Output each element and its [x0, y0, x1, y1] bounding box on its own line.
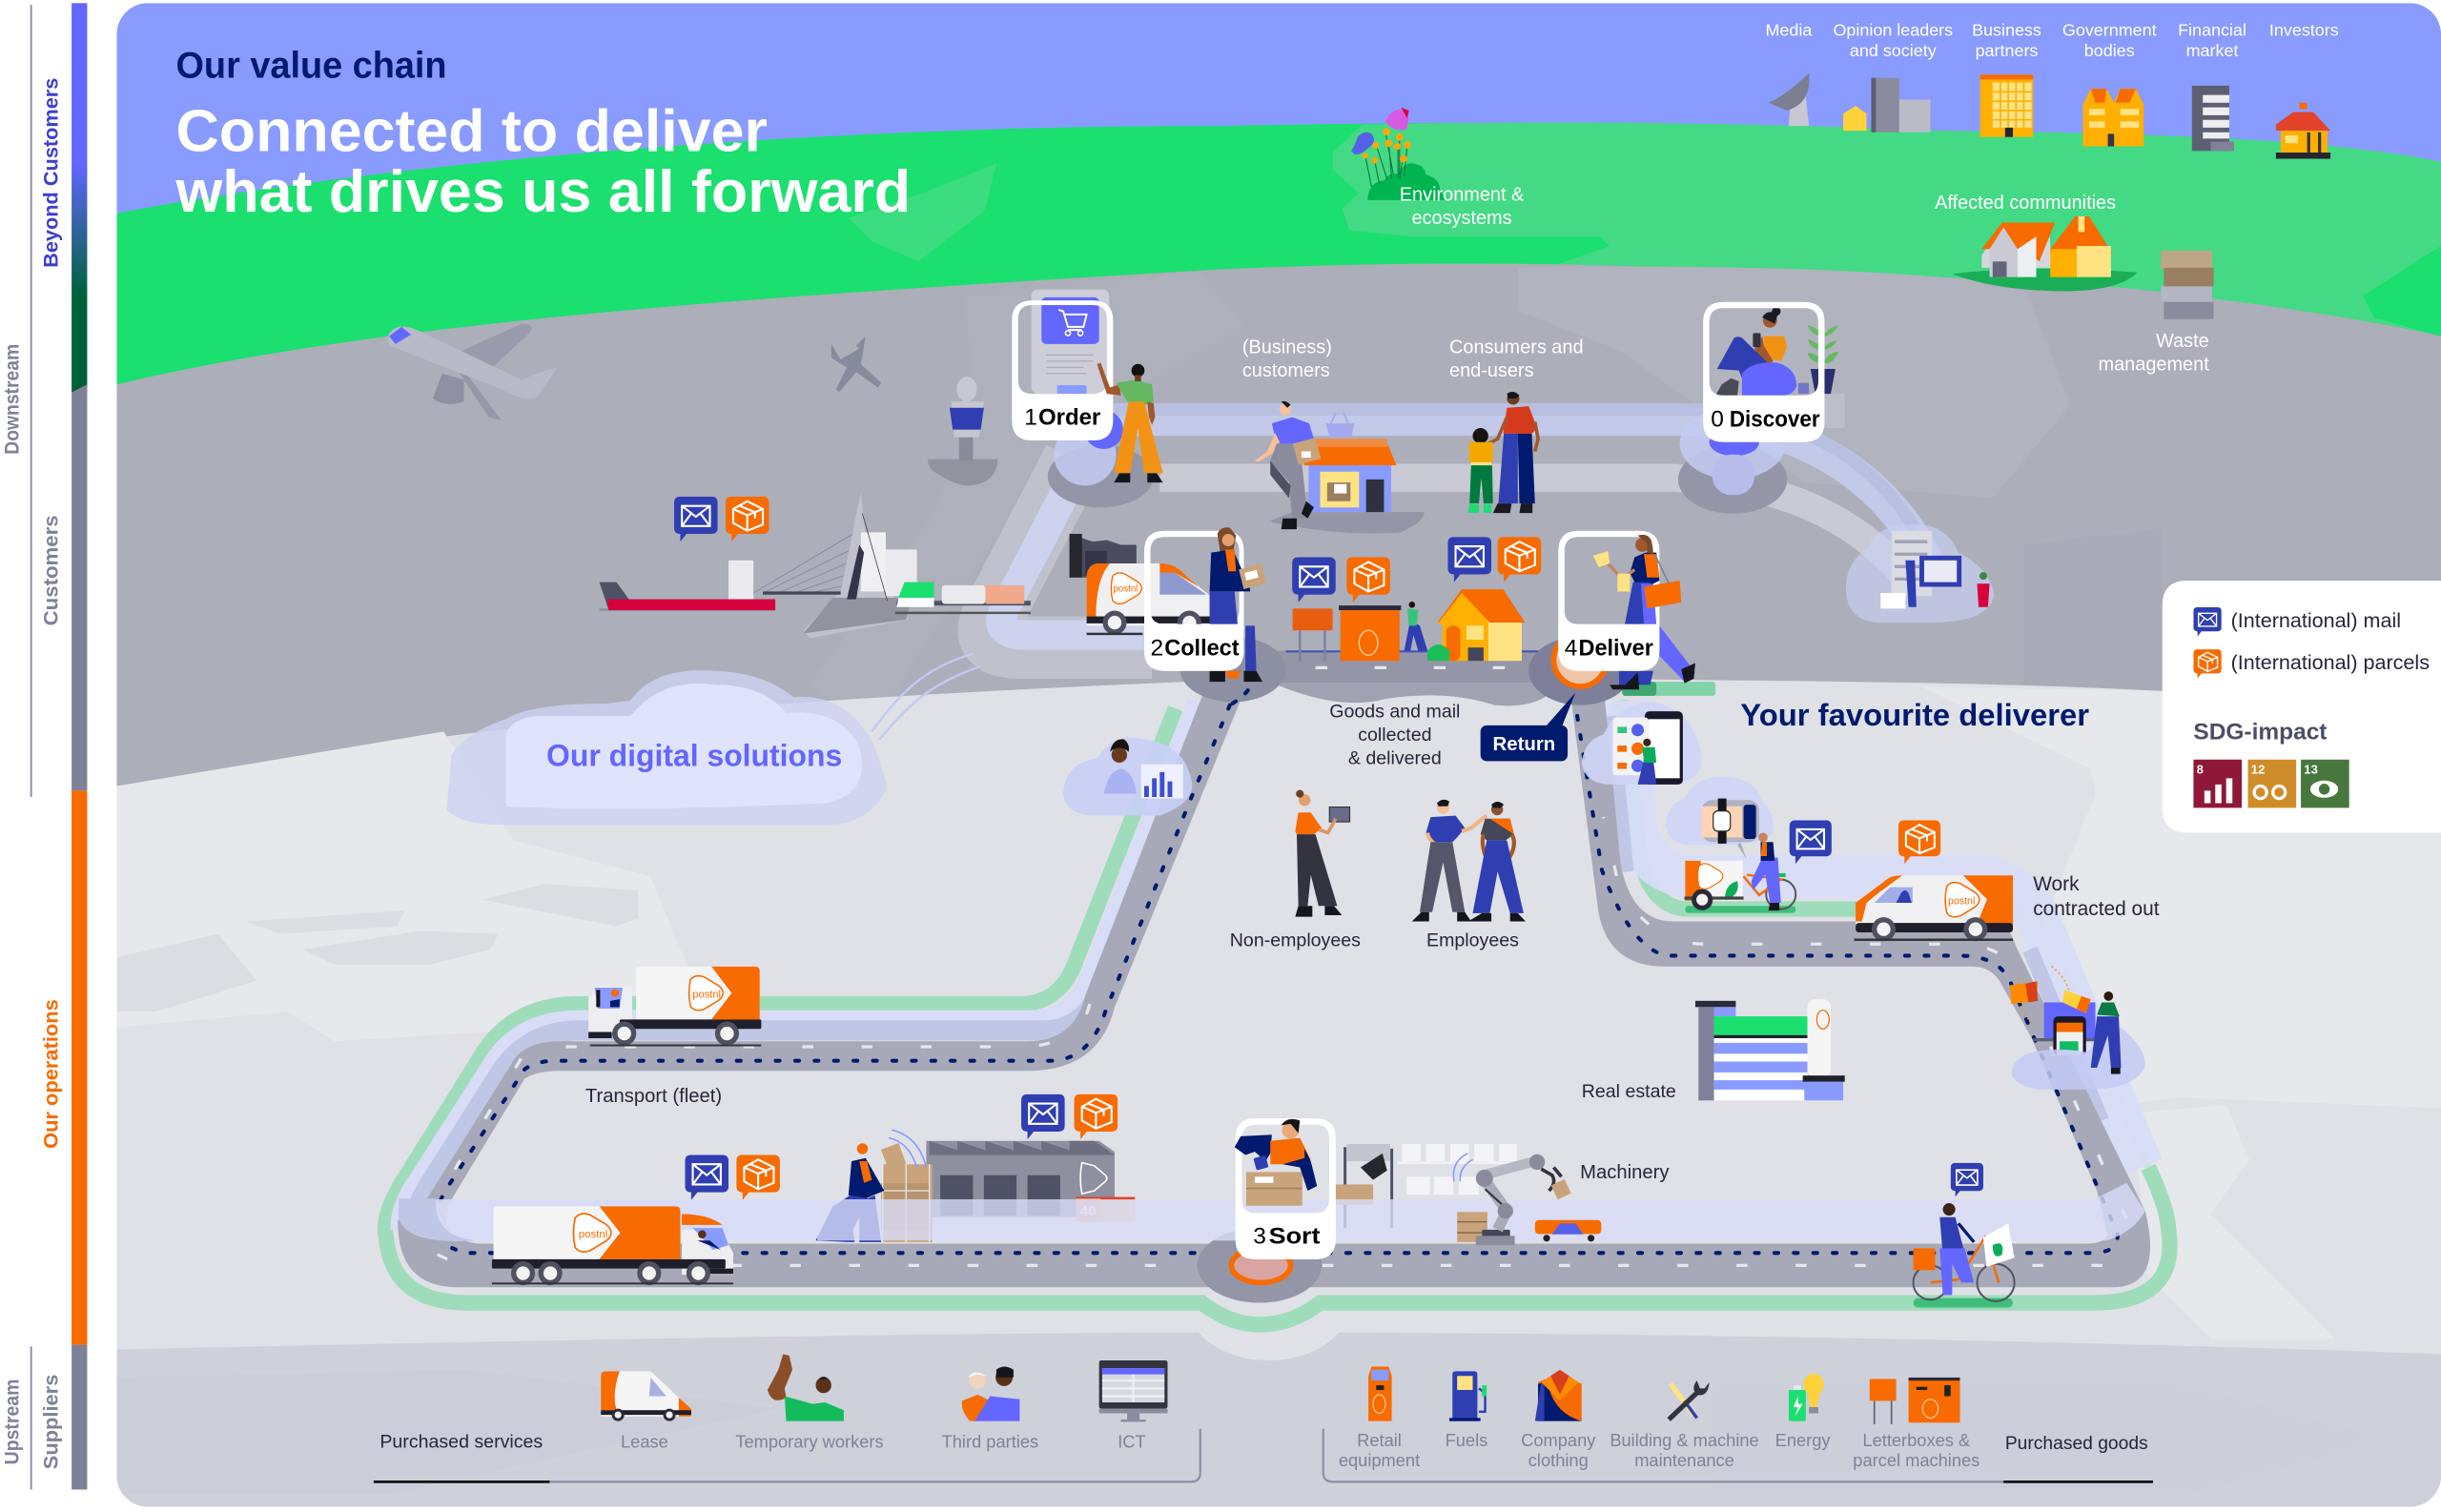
- transport label: Transport (fleet): [585, 1086, 722, 1107]
- goods labels: Building & machine: [1610, 1430, 1759, 1450]
- label: Customers: Customers: [40, 515, 62, 625]
- customers label: (Business): [1242, 337, 1332, 358]
- icon: tall yellow building: [1980, 74, 2033, 137]
- icon: plants, environment and ecosystems: [1351, 108, 1446, 200]
- green route band: [385, 701, 2170, 1324]
- icon: AGV robot: [1535, 1220, 1601, 1241]
- goods labels: Fuels: [1446, 1430, 1487, 1450]
- non-employees label: Non-employees: [1230, 930, 1361, 951]
- cloud: data centre and laptop: [1846, 524, 1994, 623]
- step label: Goods and mail: [1329, 702, 1460, 769]
- goods labels: clothing: [1528, 1450, 1589, 1470]
- upper route: Order to Discover to cloud: [1113, 409, 1930, 579]
- icon: temporary worker: [768, 1354, 844, 1421]
- legend panel: [2163, 581, 2441, 832]
- icon: energy: [1789, 1374, 1824, 1421]
- legend panel: (International) mail: [2231, 608, 2401, 632]
- top stakeholder labels: Opinion leaders: [1833, 21, 1953, 40]
- icon: train: [895, 582, 1031, 614]
- lavender stream overlay on warehouse and machines: [817, 1183, 2145, 1240]
- icon: bridge: [753, 492, 917, 638]
- step label: Goods and mail: Goods and mail: [1329, 702, 1460, 723]
- collect road dots over circle: [1230, 660, 1254, 705]
- icon: bubbles at ship: [674, 497, 769, 541]
- waste management label: Waste: [2156, 331, 2209, 352]
- customers label: customers: [1242, 360, 1330, 381]
- step label: 4 Deliver: Deliver: [1579, 635, 1653, 661]
- consumers label: [1449, 337, 1584, 381]
- person: non-employee: [1295, 790, 1350, 917]
- services labels: Lease: [621, 1431, 668, 1451]
- icon: parcel machine and letterbox at collect: [1293, 602, 1427, 661]
- person: discover reader: [1715, 307, 1809, 396]
- title: [174, 46, 911, 225]
- legend panel: 8: [2197, 762, 2204, 776]
- plant behind discover card: [1808, 320, 1845, 428]
- environment label: ecosystems: [1412, 208, 1512, 229]
- icon: fleet truck: [588, 967, 761, 1046]
- people: employees: [1412, 800, 1526, 922]
- affected communities label: Affected communities: [1935, 193, 2116, 214]
- people: parent and child: [1468, 392, 1538, 513]
- icon: mail bubble at cyclist: [1951, 1163, 1983, 1196]
- icon: satellite dish: [1769, 73, 1810, 126]
- services labels: ICT: [1118, 1431, 1146, 1451]
- step label: 4 Deliver: [1558, 624, 1659, 671]
- step card: 0 Discover: Discover: [1730, 406, 1820, 432]
- icon: big truck: postnl: [579, 1229, 607, 1240]
- work contracted out label: [2033, 873, 2160, 920]
- cloud: phone app: [1582, 702, 1702, 785]
- icon: waste stack: [2161, 251, 2214, 319]
- icon: third parties: [962, 1366, 1019, 1421]
- icon: house: [1427, 589, 1526, 661]
- step card: 1 Order: 1: [1024, 405, 1037, 431]
- icon: investors house: [2276, 103, 2330, 159]
- step label: 3 Sort: 3: [1253, 1224, 1266, 1250]
- cloud: parcel locker app: [2010, 967, 2145, 1090]
- real estate label: Real estate: [1582, 1081, 1676, 1102]
- route stops: Order and Discover circles: [1048, 408, 1787, 514]
- step label: Goods and mail: collected: [1358, 725, 1431, 746]
- services labels: [621, 1431, 1146, 1451]
- step card: 0 Discover: 0: [1711, 406, 1724, 432]
- label: Upstream: Upstream: [2, 1379, 24, 1464]
- waste management label: management: [2099, 355, 2209, 376]
- step label: 2 Collect: [1144, 624, 1243, 671]
- icon: company clothing: [1535, 1370, 1582, 1421]
- top stakeholder labels: Media: [1765, 21, 1812, 40]
- icon: bubbles at parcel machine: [1292, 558, 1390, 603]
- icon: lease van: [601, 1371, 691, 1421]
- top stakeholder labels: bodies: [2084, 41, 2135, 60]
- icon: ICT monitor: [1099, 1360, 1167, 1421]
- icon: letterbox and parcel machine: [1870, 1378, 1960, 1424]
- step label: 3 Sort: [1236, 1213, 1336, 1259]
- person pointing at phone: [1097, 362, 1163, 482]
- consumers label: Consumers and: [1449, 337, 1584, 358]
- top stakeholder labels: and society: [1850, 41, 1937, 60]
- person: deliverer: [1593, 535, 1715, 696]
- legend panel: SDG-impact: [2193, 720, 2327, 746]
- step label: Goods and mail: & delivered: [1348, 748, 1442, 769]
- top stakeholder labels: Financial: [2178, 21, 2246, 40]
- icon: houses, affected communities: [1952, 216, 2138, 291]
- goods labels: Letterboxes &: [1862, 1430, 1970, 1450]
- person: business customer: [1255, 401, 1321, 529]
- icon: distant factory: [1070, 534, 1137, 578]
- person: warehouse worker with parcels: [816, 1130, 933, 1242]
- icon: tools: [1669, 1380, 1710, 1420]
- icon: delivery van: postnl: [1948, 896, 1975, 908]
- consumers label: end-users: [1449, 360, 1534, 381]
- icon: financial tower: [2192, 86, 2234, 151]
- icon: bubbles at warehouse: [1021, 1094, 1118, 1139]
- icon: warehouse: [926, 1141, 1135, 1222]
- icon: real estate: [1695, 999, 1845, 1100]
- route stops: Collect, Deliver and Sort circles: [1180, 634, 1631, 1303]
- icon: big truck: [492, 1206, 733, 1285]
- machinery label: Machinery: [1580, 1162, 1670, 1183]
- icon: fleet truck: postnl: [692, 990, 721, 1001]
- work contracted out label: contracted out: [2033, 898, 2160, 920]
- work contracted out label: Work: [2033, 873, 2080, 895]
- cloud: smart watch: [1666, 777, 1774, 859]
- top stakeholder labels: market: [2186, 41, 2238, 60]
- icon: robot arm: [1453, 1154, 1571, 1245]
- goods labels: parcel machines: [1853, 1450, 1979, 1470]
- icon: cargo bike: [1685, 832, 1795, 913]
- services labels: Third parties: [942, 1431, 1038, 1451]
- digital solutions cloud: Our digital solutions: [546, 737, 842, 772]
- icon: cyclist: [1914, 1203, 2015, 1307]
- title: Connected to deliver: [175, 98, 768, 164]
- legend panel: (International) parcels: [2231, 650, 2430, 674]
- environment label: Environment &: [1400, 185, 1524, 206]
- icon: small plane: [831, 337, 881, 392]
- goods labels: [1339, 1430, 1979, 1470]
- person: sorter: [1235, 1119, 1317, 1206]
- goods labels: Energy: [1775, 1430, 1831, 1450]
- label: Suppliers: Suppliers: [40, 1375, 62, 1469]
- icon: delivery van: [1854, 875, 2013, 941]
- employees label: Employees: [1426, 930, 1519, 951]
- title: what drives us all forward: [174, 159, 911, 225]
- top stakeholder labels: Government: [2062, 21, 2157, 40]
- icon: fuel pump: [1449, 1371, 1487, 1421]
- step card: 1 Order: Order: [1038, 405, 1101, 431]
- road: [398, 684, 2150, 1287]
- top stakeholder labels: partners: [1976, 41, 2038, 60]
- legend panel: 13: [2304, 762, 2318, 776]
- left stakeholder bars: [31, 3, 87, 1489]
- legend panel: 12: [2251, 762, 2265, 776]
- icon: bubbles at truck: [685, 1154, 780, 1200]
- heading: Your favourite deliverer: Your favourite deliverer: [1740, 697, 2089, 732]
- phone on order screen: [1032, 290, 1109, 395]
- person: courier at collect: [1210, 527, 1266, 682]
- step label: 2 Collect: Collect: [1164, 635, 1240, 661]
- cloud: support agent: [1063, 738, 1192, 816]
- icon: sorting machines and shelves: [1336, 1144, 1523, 1228]
- customers label: [1242, 337, 1332, 381]
- icon: control tower: [928, 377, 998, 485]
- upper route: Order to Collect: [989, 455, 1152, 647]
- icon: bubbles at house: [1447, 537, 1541, 582]
- step card frame: 2 Collect: [1144, 531, 1243, 671]
- icon: office blocks: [1843, 78, 1930, 133]
- label: Downstream: Downstream: [2, 344, 24, 455]
- lavender stream: [399, 701, 2143, 1230]
- return tag: Return: [1493, 734, 1555, 755]
- road markings: [437, 705, 2126, 1265]
- icon: government building: [2082, 89, 2144, 146]
- icon: collect van: [1087, 563, 1214, 635]
- waste management label: [2099, 331, 2209, 376]
- step label: 2 Collect: 2: [1151, 635, 1163, 661]
- title: Our value chain: [175, 46, 447, 87]
- step card: 0 Discover: [1703, 302, 1824, 442]
- goods labels: maintenance: [1634, 1450, 1734, 1470]
- icon: plane: [388, 324, 557, 420]
- step card frame: 4 Deliver: [1558, 531, 1659, 671]
- label: Purchased goods: Purchased goods: [2005, 1434, 2148, 1454]
- icon: parcel bubble at van: [1898, 820, 1940, 864]
- icon: ship: [600, 561, 775, 611]
- step card frame: 3 Sort: [1236, 1118, 1336, 1259]
- bracket: purchased services: [374, 1429, 1200, 1481]
- icon: mail bubble at cargo bike: [1790, 820, 1832, 864]
- step label: 3 Sort: Sort: [1269, 1224, 1320, 1250]
- label: Our operations: Our operations: [40, 999, 62, 1149]
- top stakeholder labels: Investors: [2269, 21, 2339, 40]
- icon: shop: [1269, 413, 1425, 534]
- icon: collect van: postnl: [1113, 583, 1138, 594]
- label: Beyond Customers: Beyond Customers: [40, 78, 62, 268]
- goods labels: Company: [1521, 1430, 1596, 1450]
- top stakeholder labels: [1765, 21, 2339, 60]
- step label: 4 Deliver: 4: [1565, 635, 1577, 661]
- goods labels: equipment: [1339, 1450, 1420, 1470]
- services labels: Temporary workers: [735, 1431, 884, 1451]
- lavender stream over lower road, left part: [399, 1198, 817, 1241]
- digital solutions cloud: [447, 654, 981, 825]
- upper road between Collect and Deliver: [1230, 650, 1580, 705]
- label: Purchased services: Purchased services: [379, 1431, 543, 1452]
- return tag: [1481, 693, 1575, 761]
- goods labels: Retail: [1357, 1430, 1402, 1450]
- environment label: [1400, 185, 1524, 229]
- step card: 1 Order: [1012, 300, 1113, 440]
- icon: retail equipment: [1368, 1366, 1392, 1421]
- icon: warehouse: 40: [1080, 1204, 1096, 1219]
- top stakeholder labels: Business: [1972, 21, 2041, 40]
- bracket: purchased goods: [1323, 1429, 2153, 1481]
